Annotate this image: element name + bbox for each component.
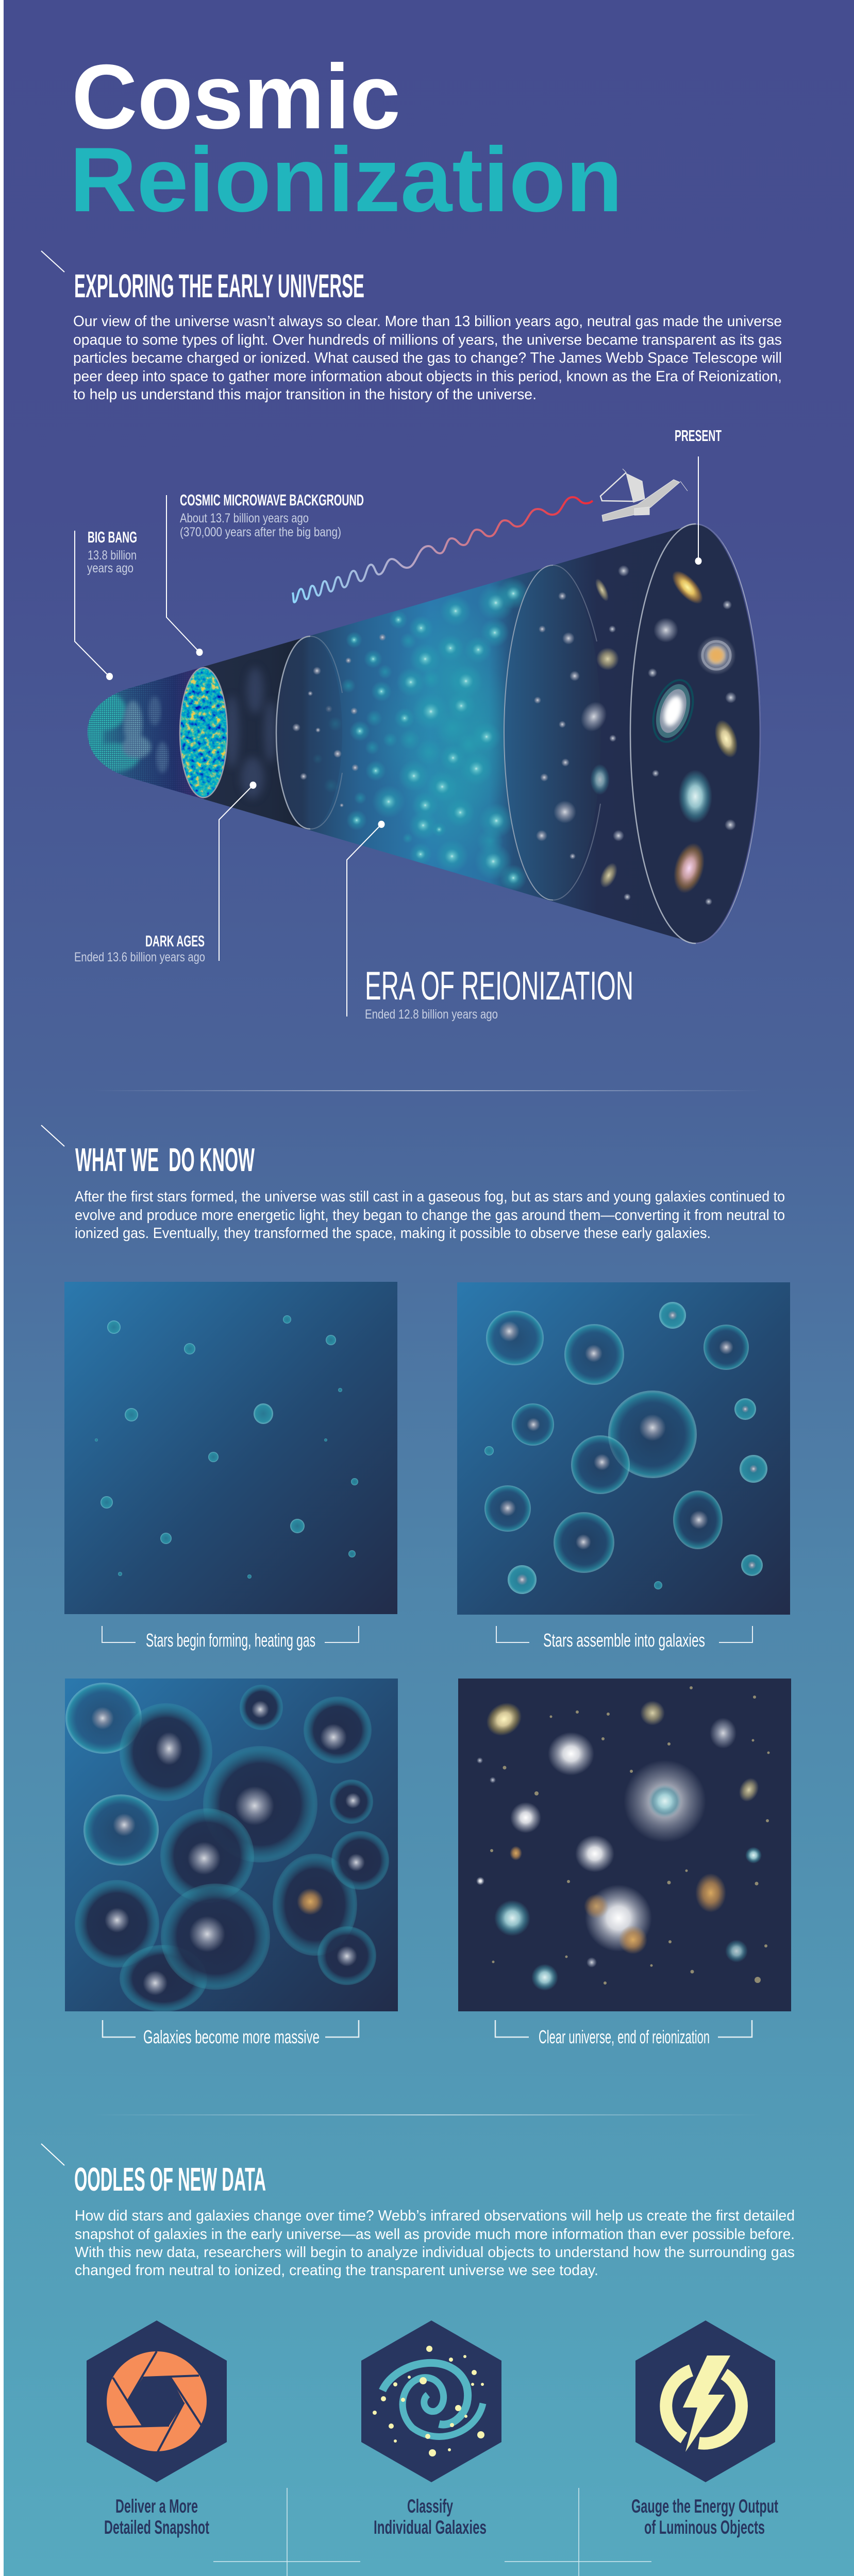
label: classify individual galaxies: Classify [407,2496,453,2517]
text block: oodles of new data [75,2208,795,2279]
callout: era of reionization: ERA OF REIONIZATION [365,963,633,1008]
text block: oodles of new data: snapshot of galaxies in the early universe—as well as provide much more information than ever possible before. [75,2226,795,2243]
label: deliver a more detailed snapshot [104,2496,209,2538]
section tick [41,251,64,272]
text block: what we do know: After the first stars formed, the universe was still cast in a gaseous fog, but as stars and young galaxies continued to [75,1189,785,1205]
callout: present: PRESENT [675,427,722,445]
callout: big bang [75,528,137,680]
label: gauge the energy output [631,2496,778,2538]
caption: stars assemble into galaxies [496,1626,752,1651]
text block: what we do know: evolve and produce more energetic light, they began to change the gas around them—converting it from neutral to [75,1207,785,1224]
intro text block: particles became charged or ionized. What caused the gas to change? The James Webb Space Telescope will [73,350,782,366]
panel: stars assemble into galaxies [457,1282,790,1615]
caption: clear universe [495,2020,752,2047]
text block: oodles of new data: With this new data, researchers will begin to analyze individual objects to understand how the surrounding gas [75,2244,795,2261]
text block: what we do know: ionized gas. Eventually, they transformed the space, making it possible to observe these early galaxies. [75,1225,711,1242]
icon: Webb telescope [600,469,688,521]
callout: cosmic microwave background: (370,000 years after the big bang) [180,525,341,539]
callout: era of reionization [347,821,633,1022]
light wave [293,497,593,602]
big bang cap [88,667,204,799]
caption: stars begin forming: Stars begin forming, heating gas [146,1630,315,1651]
label: deliver a more detailed snapshot: Deliver a More [115,2496,198,2517]
label: gauge the energy output: of Luminous Objects [644,2517,765,2538]
callout: big bang: 13.8 billion [88,548,137,563]
icon: spiral galaxy [361,2320,501,2482]
callout: cosmic microwave background [166,491,364,656]
spiral galaxy: orange core [697,636,736,675]
heading: exploring the early universe: EXPLORING THE EARLY UNIVERSE [74,267,364,304]
cone body [204,524,695,943]
caption: clear universe: Clear universe, end of reionization [539,2026,710,2047]
callout: big bang: years ago [87,561,133,575]
callout: era of reionization: Ended 12.8 billion years ago [365,1007,498,1022]
caption: stars assemble into galaxies: Stars assemble into galaxies [543,1630,705,1651]
dark ages clouds [225,667,277,799]
callout: dark ages [74,782,257,964]
title: Cosmic [72,45,400,148]
text block: oodles of new data: How did stars and galaxies change over time? Webb’s infrared observations will help us create the first detailed [75,2208,795,2224]
text block: oodles of new data: changed from neutral to ionized, creating the transparent universe we see today. [75,2262,598,2279]
title: Reionization [70,128,623,231]
panel: clear universe [458,1679,791,2011]
spiral galaxy: white core [646,675,700,747]
intro text block: Our view of the universe wasn’t always so clear. More than 13 billion years ago, neutral gas made the universe [73,313,782,330]
icon: camera aperture [87,2320,227,2482]
ellipse: end of reionization [504,565,631,901]
ellipse: end of dark ages [276,636,344,829]
callout: big bang: BIG BANG [88,528,137,546]
heading: oodles of new data: OODLES OF NEW DATA [74,2161,266,2198]
caption: galaxies become more massive [103,2020,359,2047]
reionization bubbles [312,578,529,891]
text block: what we do know [75,1189,785,1242]
intro text block: peer deep into space to gather more information about objects in this period, known as the Era of Reionization, [73,368,782,385]
intro text block: to help us understand this major transition in the history of the universe. [73,386,537,403]
label: classify individual galaxies: Individual Galaxies [374,2517,487,2538]
callout: dark ages: Ended 13.6 billion years ago [74,950,205,964]
title [70,45,623,231]
callout: dark ages: DARK AGES [145,932,205,950]
section tick [41,2144,64,2165]
ellipse: present-day universe [630,524,760,943]
section tick [41,1125,64,1146]
intro text block [73,313,782,403]
callout: present [675,427,722,565]
label: deliver a more detailed snapshot: Detailed Snapshot [104,2517,209,2538]
caption: galaxies become more massive: Galaxies become more massive [143,2026,320,2047]
panel: galaxies become more massive [65,1679,398,2012]
cone diagram of cosmic history [77,524,760,943]
icon: energy bolt [635,2320,775,2482]
intro text block: opaque to some types of light. Over hundreds of millions of years, the universe became transparent as its gas [73,332,782,348]
panel: stars begin forming [64,1282,397,1614]
CMB map disc [180,668,227,798]
label: classify individual galaxies [374,2496,487,2538]
callout: cosmic microwave background: About 13.7 billion years ago [180,511,309,526]
callout: cosmic microwave background: COSMIC MICROWAVE BACKGROUND [180,491,364,509]
heading: what we do know: WHAT WE DO KNOW [75,1141,255,1178]
caption: stars begin forming [102,1626,359,1651]
